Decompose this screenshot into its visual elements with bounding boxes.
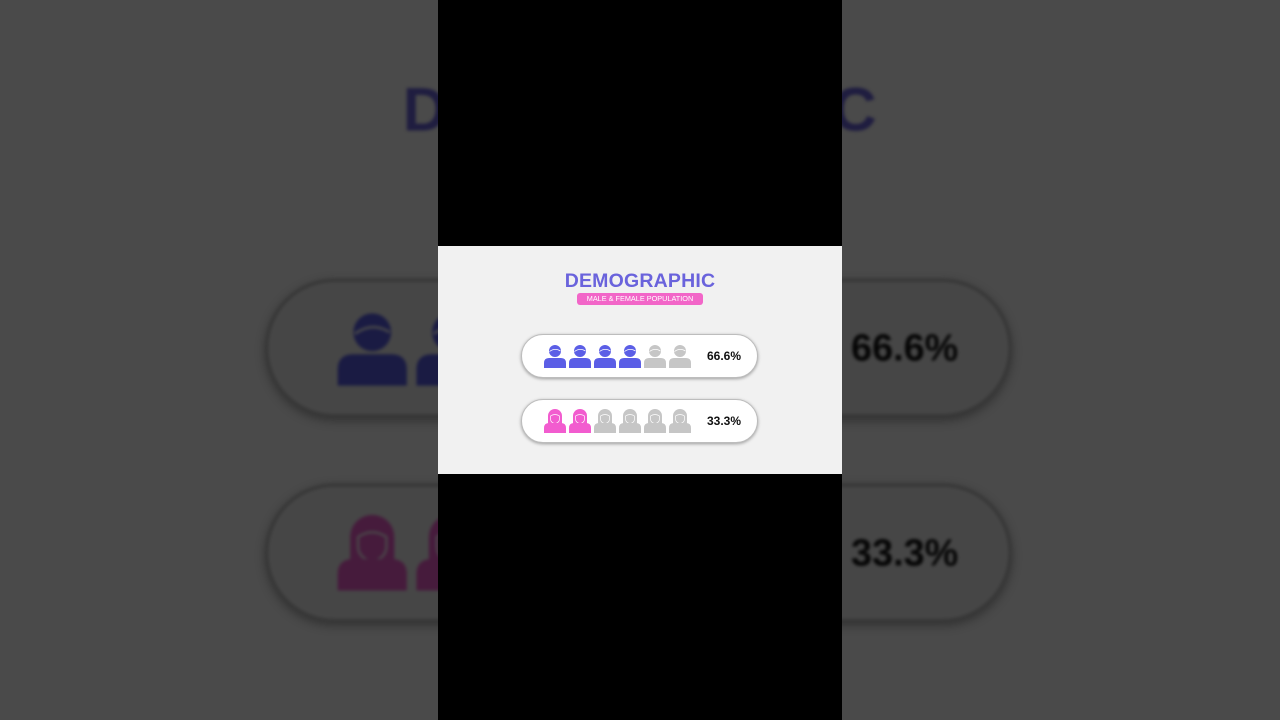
black video column — [438, 0, 842, 720]
title: DEMOGRAPHIC — [565, 270, 715, 292]
female percentage: 33.3% — [707, 414, 741, 428]
blurred background copy: 33.3% — [851, 531, 958, 575]
blurred background copy: 66.6% — [851, 326, 958, 370]
subtitle badge: MALE & FEMALE POPULATION — [587, 294, 693, 303]
icons: male figures — [544, 345, 691, 368]
blurred background copy: DEMOGRAPHIC — [403, 77, 877, 146]
infographic card — [438, 246, 842, 474]
blurred background copy: MALE & FEMALE POPULATION — [472, 153, 808, 181]
icons: female figures — [544, 409, 691, 433]
panel: male row — [521, 334, 758, 378]
male percentage: 66.6% — [707, 349, 741, 363]
subtitle badge — [577, 293, 703, 305]
panel: female row — [521, 399, 758, 443]
